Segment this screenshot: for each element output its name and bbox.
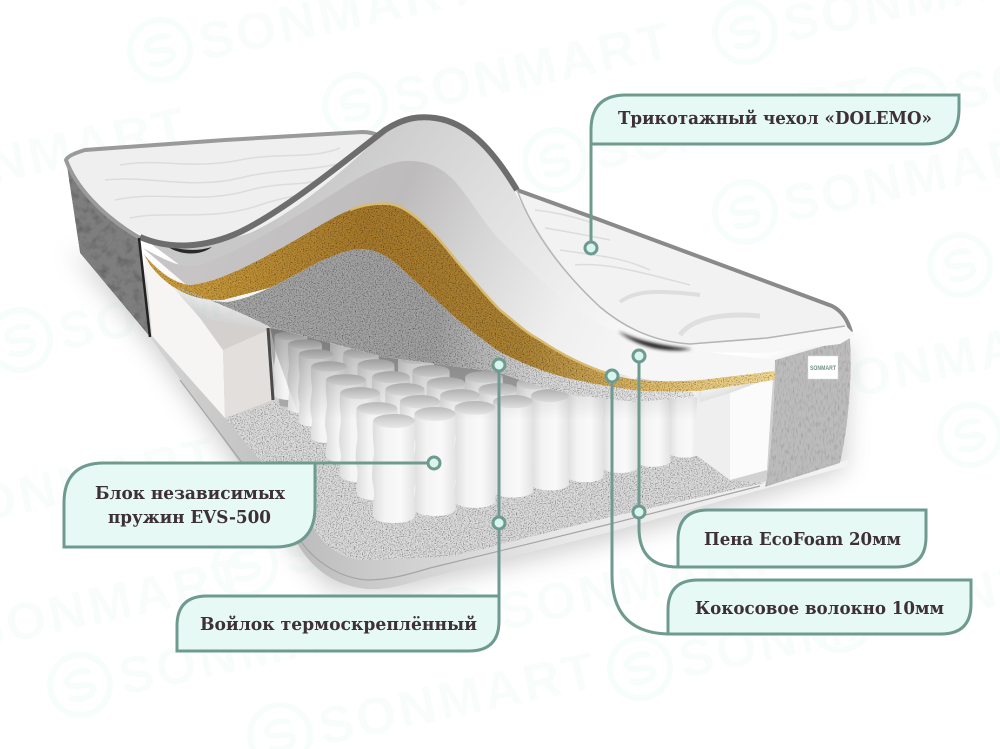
left side fabric panel	[66, 160, 150, 337]
felt floor	[225, 400, 765, 560]
coconut fibre layer	[143, 204, 775, 393]
left foam perimeter	[145, 256, 273, 418]
right foam perimeter	[693, 377, 773, 480]
shade under flap	[270, 327, 697, 425]
brand tag: SONMART	[810, 365, 836, 372]
label: spring block: Блок независимых	[95, 483, 285, 504]
label: spring block: пружин EVS-500	[108, 507, 271, 528]
cover piping strip	[140, 117, 517, 246]
label: coconut fibre: Кокосовое волокно 10мм	[695, 598, 944, 619]
brand tag	[808, 356, 838, 379]
label: EcoFoam: Пена EcoFoam 20мм	[704, 529, 901, 550]
thin cover edge line	[517, 190, 845, 344]
callout: spring block	[64, 457, 440, 547]
label: felt: Войлок термоскреплённый	[200, 614, 477, 635]
callout: thermobonded felt	[177, 359, 505, 651]
back cavity	[268, 328, 700, 458]
callout: coconut fibre	[606, 370, 971, 634]
left quilted surface	[66, 132, 383, 244]
right side fabric panel	[765, 338, 851, 487]
callout: EcoFoam	[633, 350, 926, 567]
side panel seam	[139, 238, 150, 337]
cover underside band	[143, 117, 855, 353]
label: spring block	[95, 483, 285, 528]
coconut light edge	[350, 204, 612, 375]
callout: knitted cover	[585, 95, 959, 254]
base rim seam lines	[180, 380, 760, 580]
foam EcoFoam layer	[143, 161, 775, 384]
gap shadow left	[165, 245, 212, 254]
label: cover: Трикотажный чехол «DOLEMO»	[618, 108, 932, 129]
spring block EVS-500	[274, 331, 703, 523]
base rim	[148, 334, 848, 589]
drop shadow	[70, 250, 850, 592]
right quilted surface	[517, 190, 853, 344]
felt flap	[177, 249, 695, 402]
mattress illustration	[66, 117, 855, 592]
gap shadow right	[618, 331, 692, 350]
